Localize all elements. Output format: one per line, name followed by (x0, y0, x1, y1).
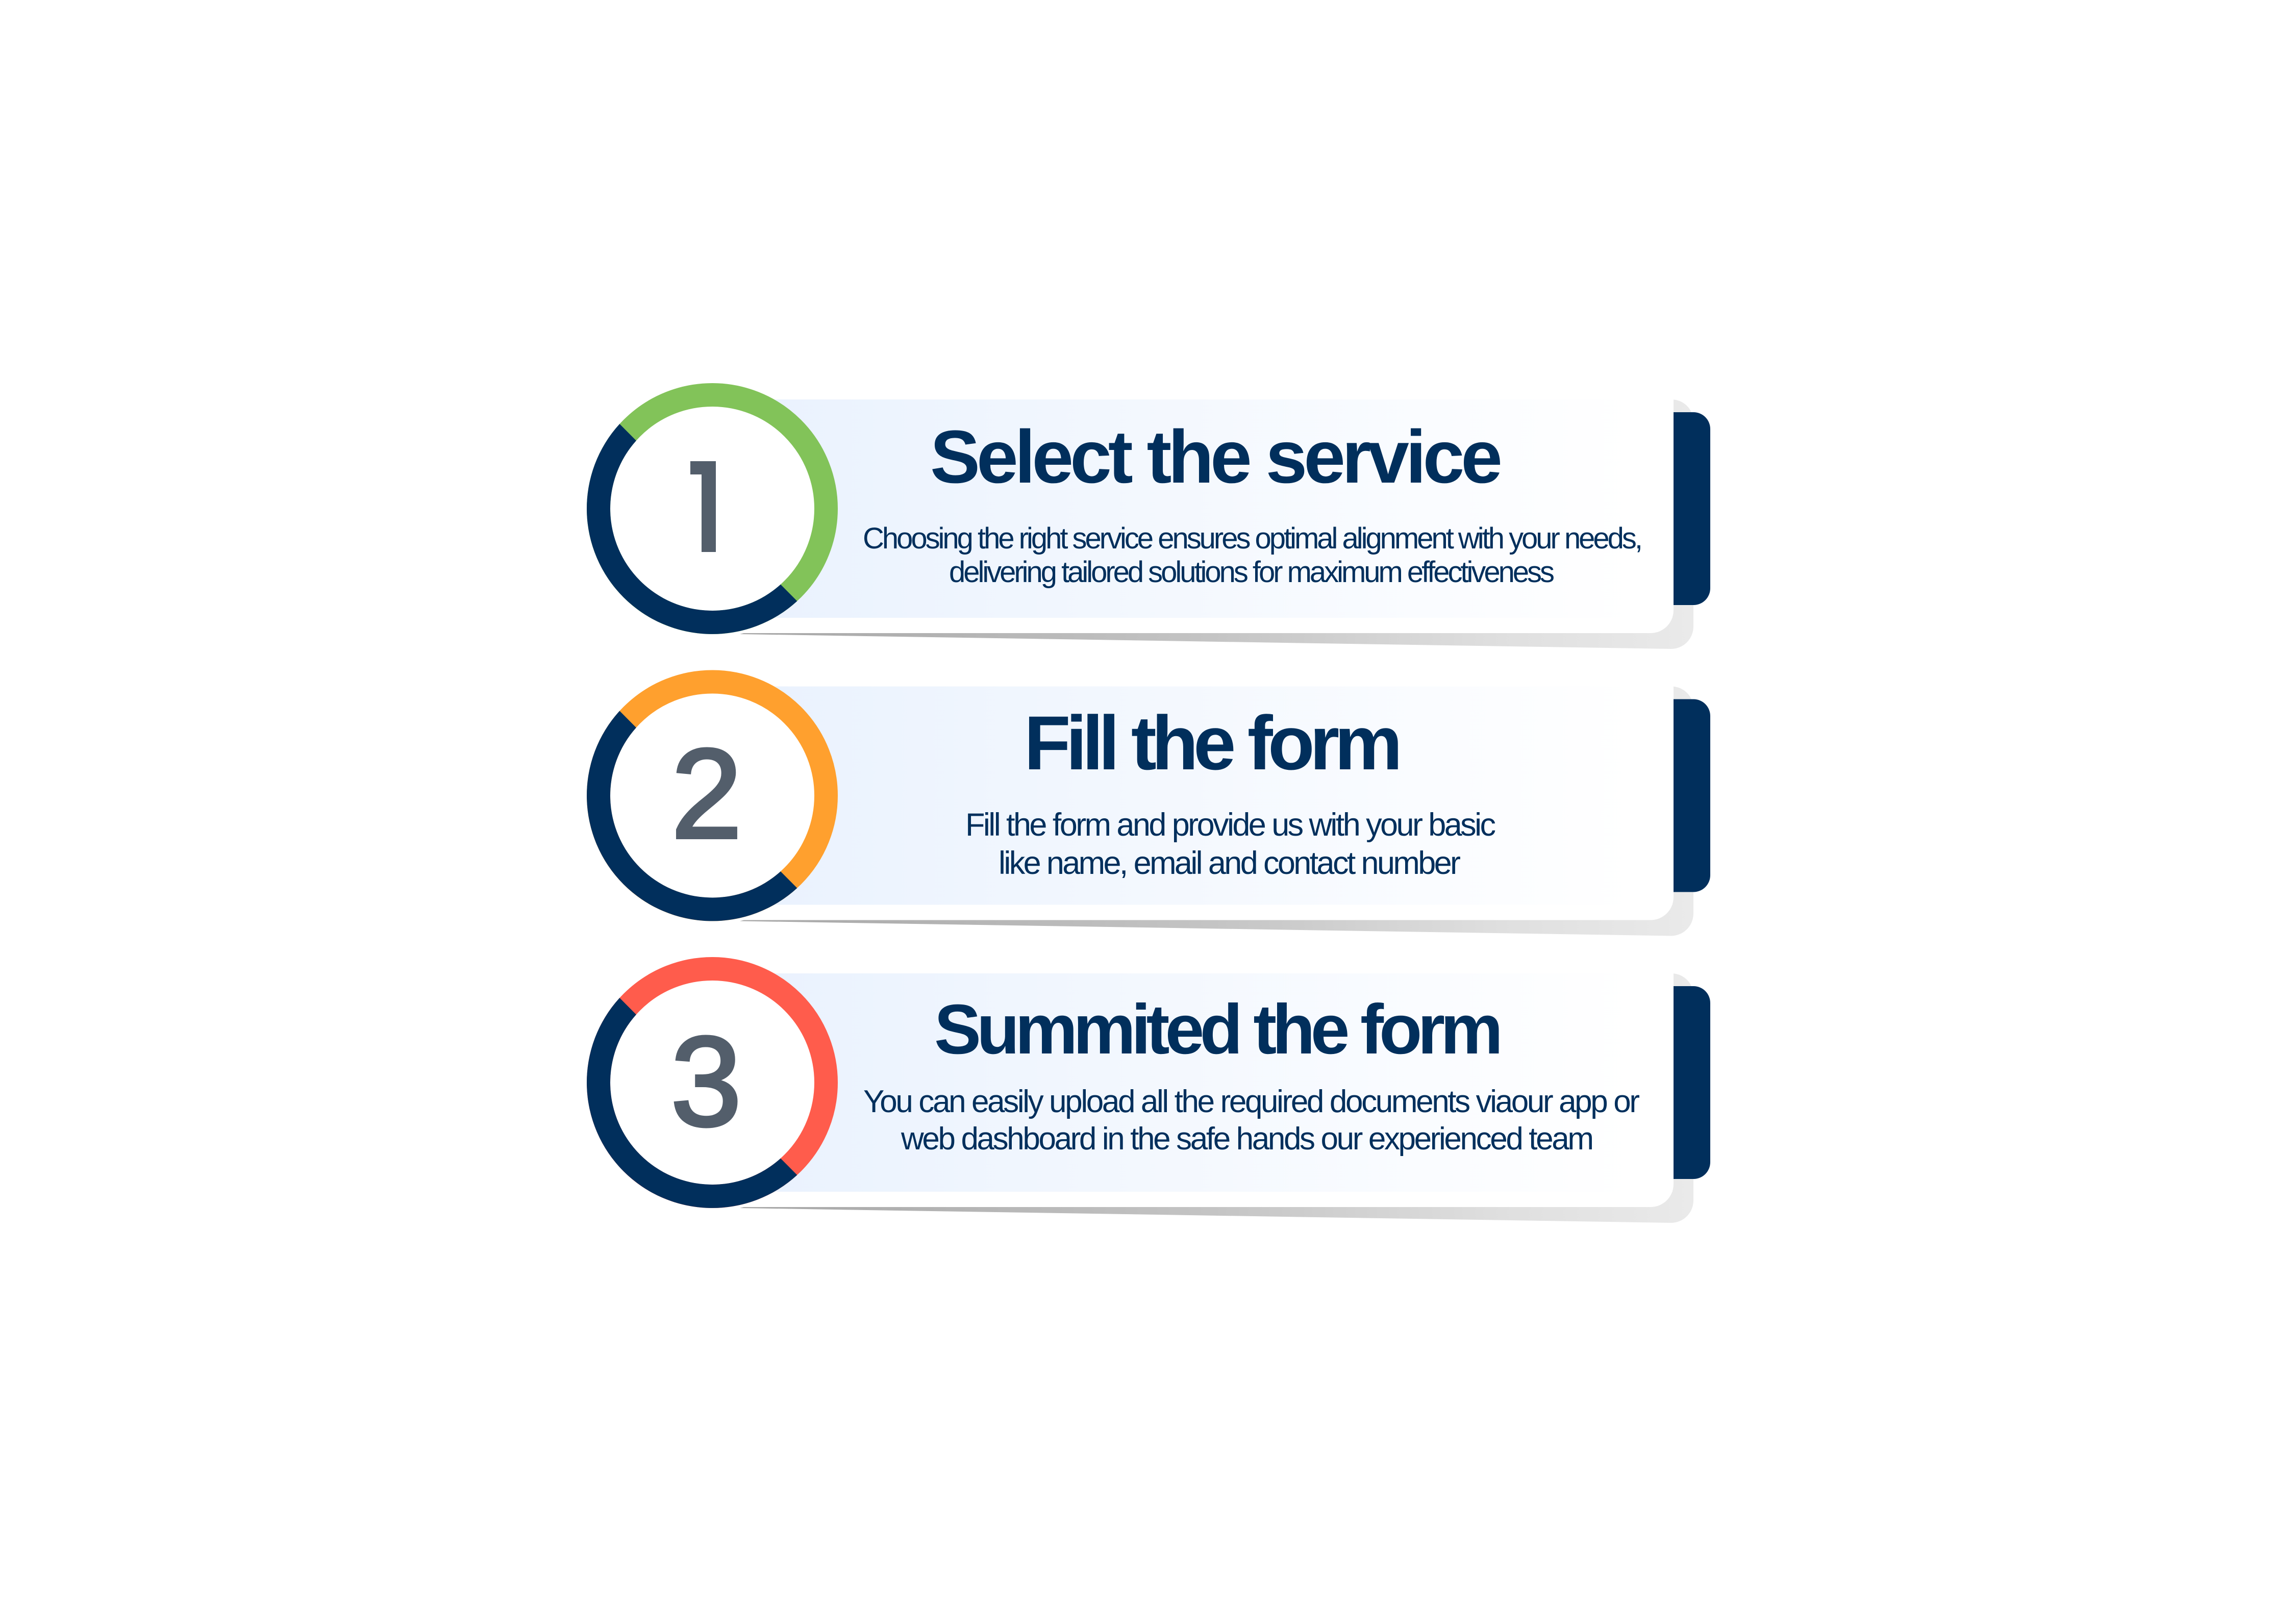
number 3: 3 (670, 1010, 742, 1152)
card shadow (740, 687, 1693, 936)
number ring (587, 969, 826, 1208)
number 1 (690, 461, 716, 552)
heading: Summited the form (934, 990, 1503, 1069)
navy side tab (1668, 412, 1710, 605)
white card (730, 399, 1674, 633)
description: like name, email and contact number (999, 845, 1461, 881)
card shadow (740, 973, 1693, 1223)
description (863, 522, 1643, 589)
panel: step 1 select the service (587, 395, 1710, 649)
heading: Select the service (930, 415, 1503, 499)
panel: step 2 fill the form (587, 682, 1710, 936)
gradient band (765, 399, 1673, 618)
number 2: 2 (671, 722, 742, 865)
white card (730, 973, 1674, 1207)
card shadow (740, 399, 1693, 649)
number ring (587, 395, 826, 634)
description: You can easily upload all the required documents viaour app or (863, 1084, 1640, 1119)
description (863, 1084, 1640, 1157)
gradient band (765, 687, 1673, 905)
description: web dashboard in the safe hands our experienced team (901, 1121, 1594, 1157)
panel: step 3 summited the form (587, 969, 1710, 1223)
number ring (587, 682, 826, 921)
heading: Fill the form (1024, 700, 1403, 786)
description: Fill the form and provide us with your basic (965, 807, 1496, 843)
description: Choosing the right service ensures optimal alignment with your needs, (863, 522, 1643, 555)
number 1: 1 (670, 433, 743, 580)
navy side tab (1668, 986, 1710, 1179)
description (965, 807, 1496, 881)
description: delivering tailored solutions for maximum effectiveness (949, 556, 1555, 589)
navy side tab (1668, 699, 1710, 892)
white card (730, 687, 1674, 920)
gradient band (765, 973, 1673, 1192)
